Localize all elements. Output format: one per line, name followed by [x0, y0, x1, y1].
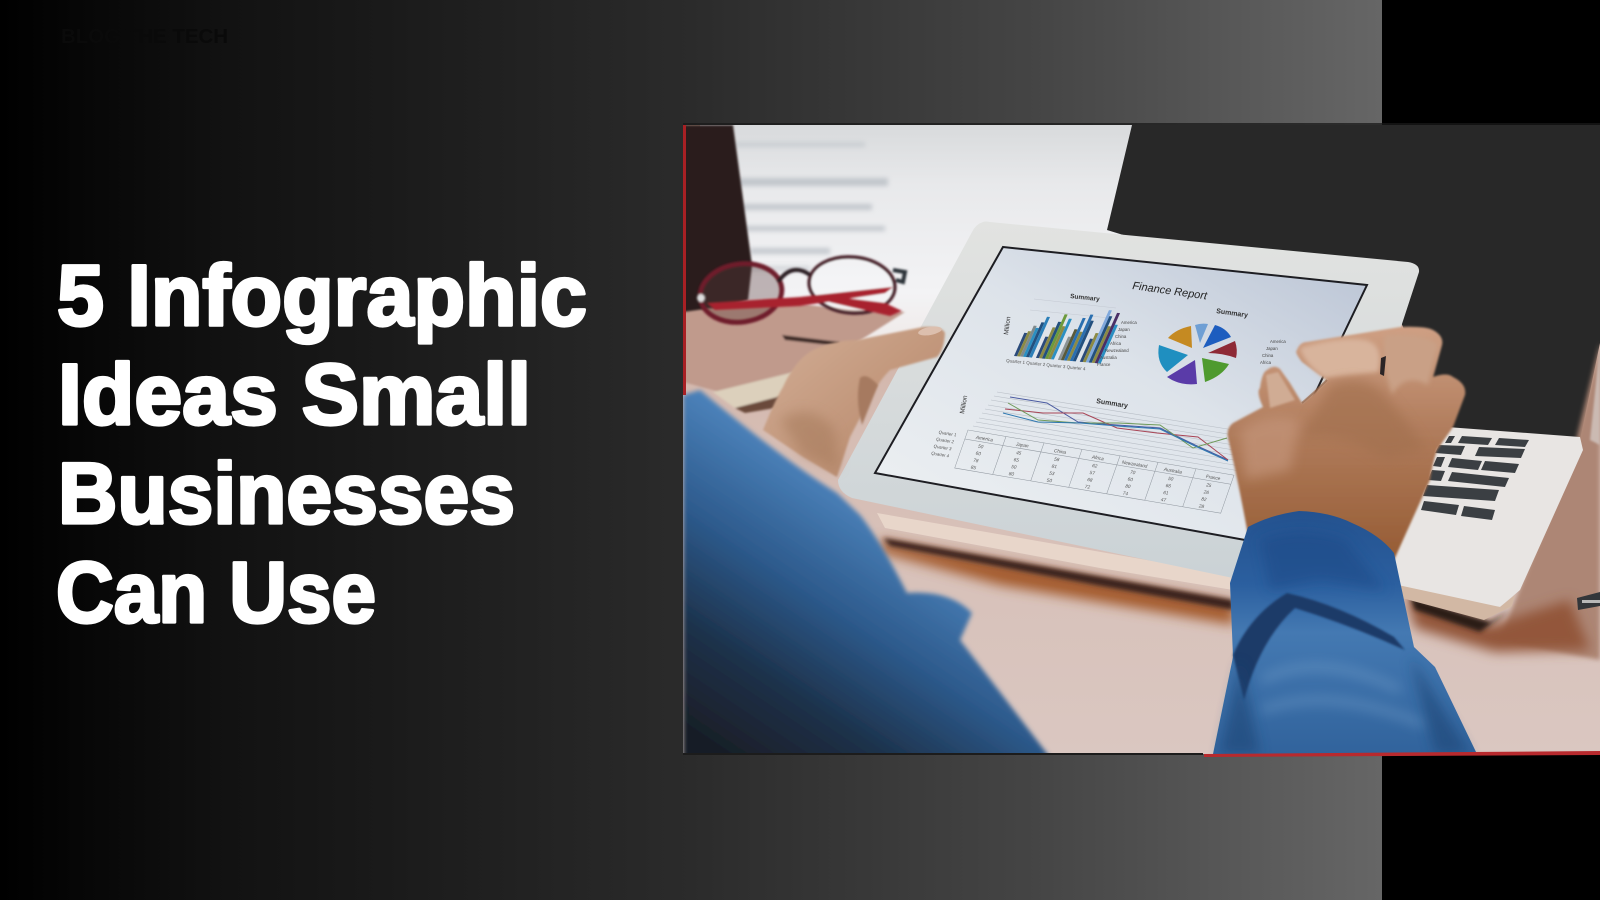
bar chart: China	[1115, 334, 1127, 339]
photo bottom edge: dark	[683, 753, 1203, 755]
table edge right of laptop	[1500, 343, 1600, 660]
data table: 50	[1167, 476, 1175, 483]
data table: 60	[975, 451, 982, 457]
data table: 82	[1200, 496, 1208, 503]
right hand	[1228, 327, 1465, 560]
data table: 70	[1129, 470, 1137, 476]
data table: Australia	[1163, 467, 1183, 476]
data table: 80	[1124, 484, 1132, 490]
data table: 57	[1089, 470, 1096, 477]
brand label: BLOG THE TECH	[61, 25, 228, 48]
line chart	[959, 392, 1240, 471]
data table: 78	[972, 458, 980, 464]
data table: China	[1053, 448, 1067, 456]
pie chart: Japan	[1266, 346, 1278, 351]
line chart: Summary	[1096, 398, 1128, 410]
pie chart: Africa	[1260, 360, 1272, 365]
title: Can Use	[56, 545, 376, 641]
report heading: Finance Report	[1132, 280, 1209, 303]
data table: 61	[1162, 490, 1170, 497]
data table: 65	[1013, 457, 1020, 464]
data table: Japan	[1015, 442, 1030, 450]
data table: America	[975, 435, 994, 444]
bar chart: Africa	[1110, 341, 1122, 346]
photo left red edge	[683, 125, 686, 395]
bar chart	[1003, 293, 1137, 371]
bar chart: Summary	[1070, 293, 1100, 303]
data table: 74	[1122, 491, 1129, 497]
left sleeve	[683, 390, 1052, 760]
bar chart: Million	[1003, 316, 1013, 335]
title: Ideas Small	[58, 347, 531, 443]
data table: Quarter 1	[938, 430, 958, 437]
pie chart	[1158, 308, 1286, 384]
data table: 45	[1015, 450, 1023, 457]
title: 5 Infographic	[57, 248, 587, 344]
glasses	[696, 253, 905, 327]
photo top shadow edge	[683, 123, 1600, 125]
keyboard	[1421, 436, 1529, 520]
laptop base	[877, 427, 1583, 620]
data table: 47	[1160, 497, 1167, 504]
tablet screen	[875, 247, 1367, 540]
data table: Quarter 4	[931, 451, 950, 458]
data table: 50	[1046, 478, 1053, 484]
tablet body	[838, 222, 1419, 600]
bar chart: America	[1121, 320, 1137, 325]
title: Businesses	[58, 446, 515, 542]
data table: 26	[1203, 489, 1210, 496]
data table: 53	[1048, 471, 1056, 477]
table shadow bands	[880, 538, 1590, 652]
dark laptop screen	[1107, 125, 1600, 440]
line chart: Million	[959, 395, 969, 414]
pie chart: Summary	[1216, 308, 1248, 319]
pie chart: China	[1262, 353, 1274, 358]
data table: 80	[1008, 471, 1015, 478]
main canvas	[58, 123, 1600, 757]
left hand	[763, 325, 945, 477]
bar chart: Quarter 1 Quarter 2 Quarter 3 Quarter 4	[1006, 358, 1086, 371]
data table: 62	[1091, 463, 1099, 470]
screen content	[928, 280, 1286, 513]
data table: France	[1205, 474, 1222, 482]
data table: 81	[1051, 464, 1058, 470]
data table: 28	[1198, 503, 1205, 510]
right cuff sleeve	[1213, 511, 1477, 754]
data table: 25	[1205, 482, 1213, 489]
photo bottom edge: red	[1204, 751, 1600, 757]
bar chart: Japan	[1118, 327, 1130, 332]
data table: Quarter 2	[935, 437, 955, 444]
data table: Quarter 3	[933, 444, 953, 451]
data table: Newzealand	[1121, 460, 1149, 470]
bar chart: France	[1097, 362, 1111, 367]
pen on table	[1577, 592, 1600, 610]
data table	[928, 425, 1234, 513]
bar chart: Australia	[1100, 355, 1117, 360]
dark curtain	[683, 125, 752, 320]
data table: 60	[1127, 477, 1134, 483]
data table: 72	[1084, 484, 1091, 491]
data table: 50	[977, 444, 985, 450]
data table: 68	[1086, 477, 1094, 484]
bar chart: Newzealand	[1105, 348, 1129, 353]
data table: 50	[1010, 464, 1018, 471]
data table: 66	[1165, 483, 1172, 490]
pie chart: America	[1270, 339, 1286, 344]
title	[56, 248, 587, 641]
data table: Africa	[1091, 455, 1105, 462]
notebook	[683, 300, 905, 413]
window with blinds	[700, 125, 1132, 340]
photo: tablet with finance report on desk	[683, 125, 1600, 760]
data table: 85	[970, 465, 977, 471]
data table: 58	[1053, 457, 1061, 463]
